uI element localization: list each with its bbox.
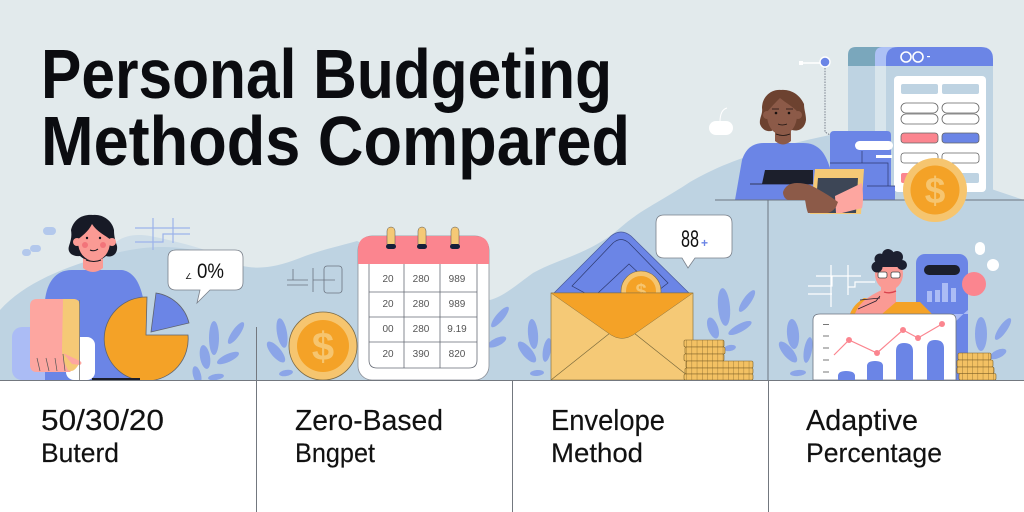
- calendar: 20: [382, 274, 394, 285]
- grid motif: [287, 268, 335, 292]
- label: adaptive percentage: Percentage: [806, 438, 942, 468]
- title: Personal Budgeting: [41, 35, 612, 113]
- chart card: [813, 314, 956, 380]
- background: [0, 0, 1024, 380]
- illustration: zero-based coin and calendar: [287, 227, 489, 380]
- ledge lines: [715, 200, 1024, 380]
- speech bubble: [656, 215, 732, 268]
- back windows: [848, 47, 900, 200]
- person: [850, 249, 932, 314]
- label: zero-based budget: [295, 405, 443, 468]
- floating circles: [962, 242, 999, 296]
- baseline and column dividers: [0, 327, 1024, 512]
- blue register block: [830, 131, 895, 200]
- calendar: [358, 227, 489, 380]
- calendar: 390: [413, 349, 430, 360]
- small white mouse icon: [709, 108, 733, 135]
- speech bubble: 0%: [197, 260, 224, 283]
- envelope body: [551, 293, 693, 380]
- illustration: 50/30/20 person and pie chart: [12, 215, 243, 381]
- calendar: 280: [413, 274, 430, 285]
- person: [12, 215, 145, 380]
- front window: [886, 47, 993, 200]
- calendar: 280: [413, 324, 430, 335]
- label: 50/30/20 budget: [41, 405, 164, 468]
- coin: $: [925, 170, 946, 211]
- calendar: 20: [382, 349, 394, 360]
- coin stack: [957, 353, 996, 380]
- label: adaptive percentage: Adaptive: [806, 405, 918, 437]
- label: 50/30/20 budget: Buterd: [41, 438, 119, 468]
- speech bubble: 88: [681, 226, 699, 253]
- background hills: [0, 135, 1024, 380]
- grid lines motif: [135, 218, 190, 250]
- coin stacks: [684, 340, 753, 380]
- calendar: 9.19: [447, 324, 467, 335]
- envelope coin: [620, 270, 662, 293]
- illustration: dashboard and person: [709, 47, 1024, 380]
- illustration: adaptive percentage: [808, 242, 999, 380]
- speech bubble: +: [701, 236, 708, 250]
- pie chart: [104, 293, 189, 381]
- label: envelope method: [551, 405, 665, 468]
- grid motif: [808, 265, 875, 307]
- envelope coin: $: [635, 281, 647, 303]
- decorative leaves: [191, 288, 1014, 385]
- envelope back flap: [554, 232, 689, 293]
- coin: [903, 158, 967, 222]
- speech bubble: [168, 250, 243, 303]
- bottom panel: [0, 380, 1024, 512]
- coin: [289, 312, 357, 380]
- title: [41, 35, 630, 180]
- title: Methods Compared: [41, 102, 630, 180]
- label: adaptive percentage: [806, 405, 942, 468]
- calendar: 989: [449, 274, 466, 285]
- label: zero-based budget: Zero-Based: [295, 405, 443, 437]
- calendar: 280: [413, 299, 430, 310]
- person: [735, 90, 830, 200]
- connector node: [799, 57, 830, 135]
- calendar: 820: [449, 349, 466, 360]
- label: envelope method: Envelope: [551, 405, 665, 437]
- calculator: [916, 254, 968, 380]
- floating pills: [22, 227, 56, 256]
- coin: $: [312, 325, 334, 369]
- tablet and hand: [783, 169, 864, 214]
- speech bubble: ∠: [185, 272, 192, 281]
- calendar: 989: [449, 299, 466, 310]
- envelope flap: [551, 293, 693, 338]
- illustration: envelope method: [551, 215, 753, 380]
- calendar: 20: [382, 299, 394, 310]
- label: 50/30/20 budget: 50/30/20: [41, 405, 164, 437]
- calendar: 00: [382, 324, 394, 335]
- label: envelope method: Method: [551, 438, 643, 468]
- label: zero-based budget: Bngpet: [295, 438, 375, 468]
